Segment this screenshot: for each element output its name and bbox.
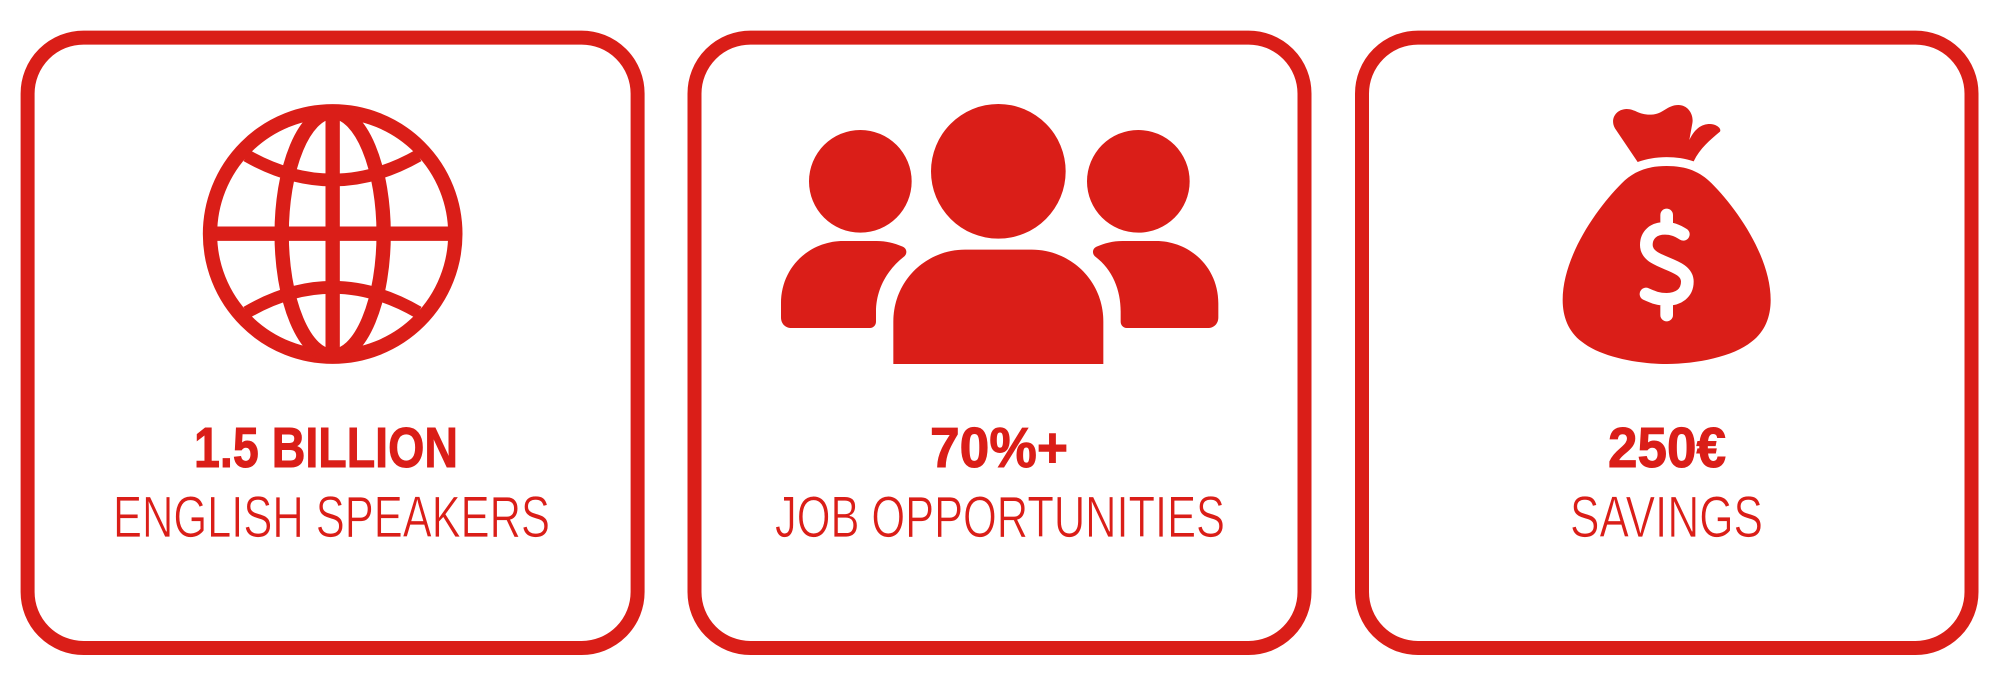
heading: 1.5 billion: 1.5 BILLION — [194, 416, 458, 480]
icon: globe — [210, 110, 455, 358]
heading: 250€: 250€ — [1608, 416, 1726, 480]
panel: job opportunities — [694, 38, 1304, 648]
label: english speakers: ENGLISH SPEAKERS — [113, 485, 550, 550]
panel: english speakers — [28, 38, 638, 648]
heading: 70%+: 70%+ — [930, 416, 1068, 480]
icon: three people — [781, 104, 1218, 364]
label: job opportunities: JOB OPPORTUNITIES — [775, 485, 1225, 550]
icon: money bag — [1563, 105, 1771, 364]
label: savings: SAVINGS — [1570, 485, 1763, 550]
panel: savings — [1362, 38, 1972, 648]
